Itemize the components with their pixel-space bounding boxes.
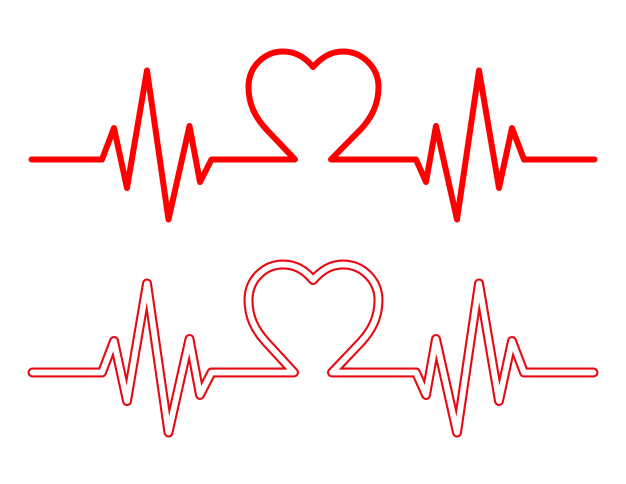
solid red heartbeat line with heart (32, 52, 594, 220)
outlined red heartbeat line with heart (32, 264, 594, 432)
